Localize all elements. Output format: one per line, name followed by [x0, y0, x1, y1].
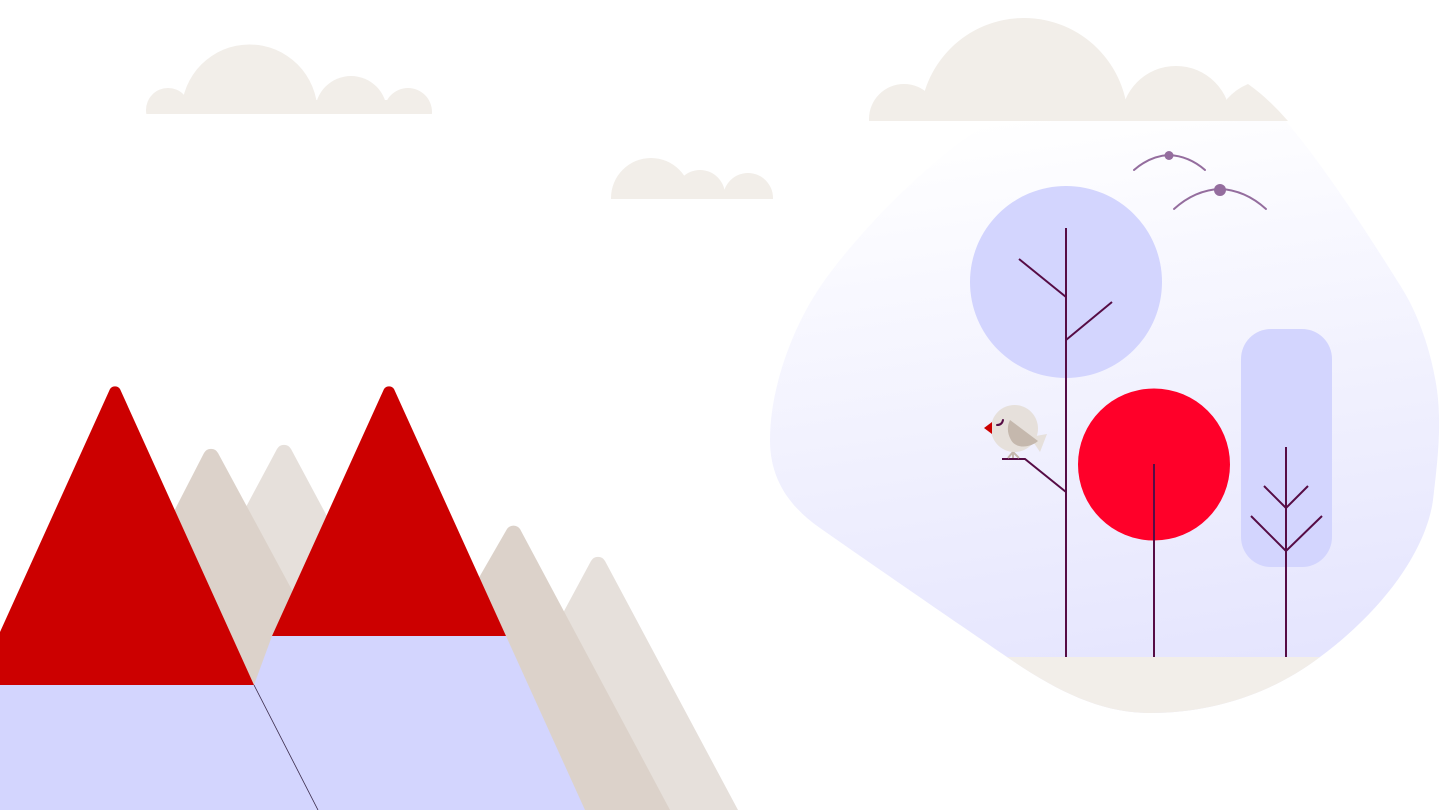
bird: large — [1174, 184, 1266, 209]
mountain edge line — [254, 685, 318, 810]
cloud: middle — [611, 158, 773, 199]
eye — [997, 420, 1003, 425]
cloud: top right — [869, 18, 1288, 121]
flying birds — [1134, 151, 1266, 209]
wing — [1008, 420, 1038, 446]
tree: red round — [1078, 388, 1230, 657]
cloud: top left — [146, 44, 432, 114]
mountain: beige right — [400, 526, 670, 810]
tree: lavender rounded rectangle — [1241, 329, 1332, 657]
legs — [1008, 452, 1019, 458]
mountain: light far right — [450, 557, 738, 810]
ground — [1008, 657, 1320, 713]
tail — [1030, 434, 1047, 452]
mountain: lavender base right — [254, 636, 585, 810]
mountains — [0, 386, 738, 810]
mountain: lavender base left — [0, 685, 318, 810]
beak — [984, 422, 992, 434]
bird: small — [1134, 151, 1205, 170]
perched bird — [984, 405, 1047, 458]
mountain: light left — [200, 445, 420, 690]
mountain: red peak right — [272, 386, 506, 636]
body — [991, 405, 1038, 452]
mountain: beige left — [150, 449, 360, 716]
mountain: red peak left — [0, 386, 254, 685]
tree: lavender round — [970, 186, 1162, 657]
blob background — [770, 66, 1439, 713]
